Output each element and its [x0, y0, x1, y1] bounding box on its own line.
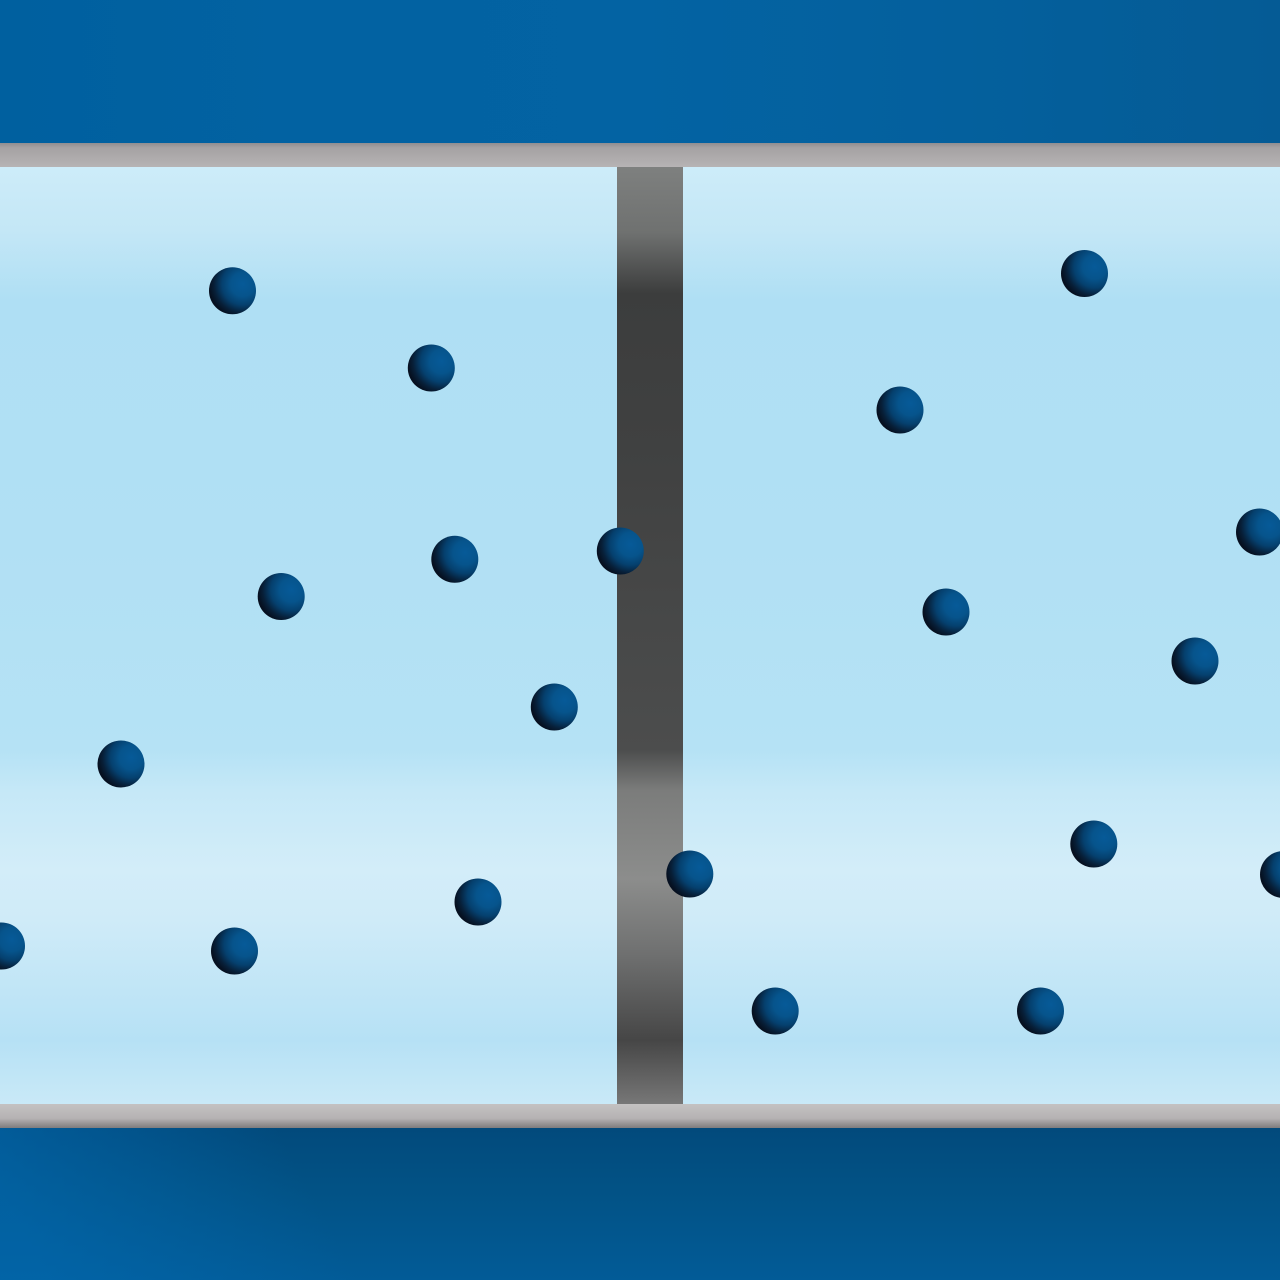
central vertical barrier [617, 167, 683, 1104]
particles [0, 250, 1280, 1034]
fluid channel [0, 167, 1280, 1104]
top grey wall [0, 143, 1280, 167]
bottom blue band [0, 1128, 1280, 1280]
bottom grey wall [0, 1104, 1280, 1128]
top blue band [0, 0, 1280, 143]
